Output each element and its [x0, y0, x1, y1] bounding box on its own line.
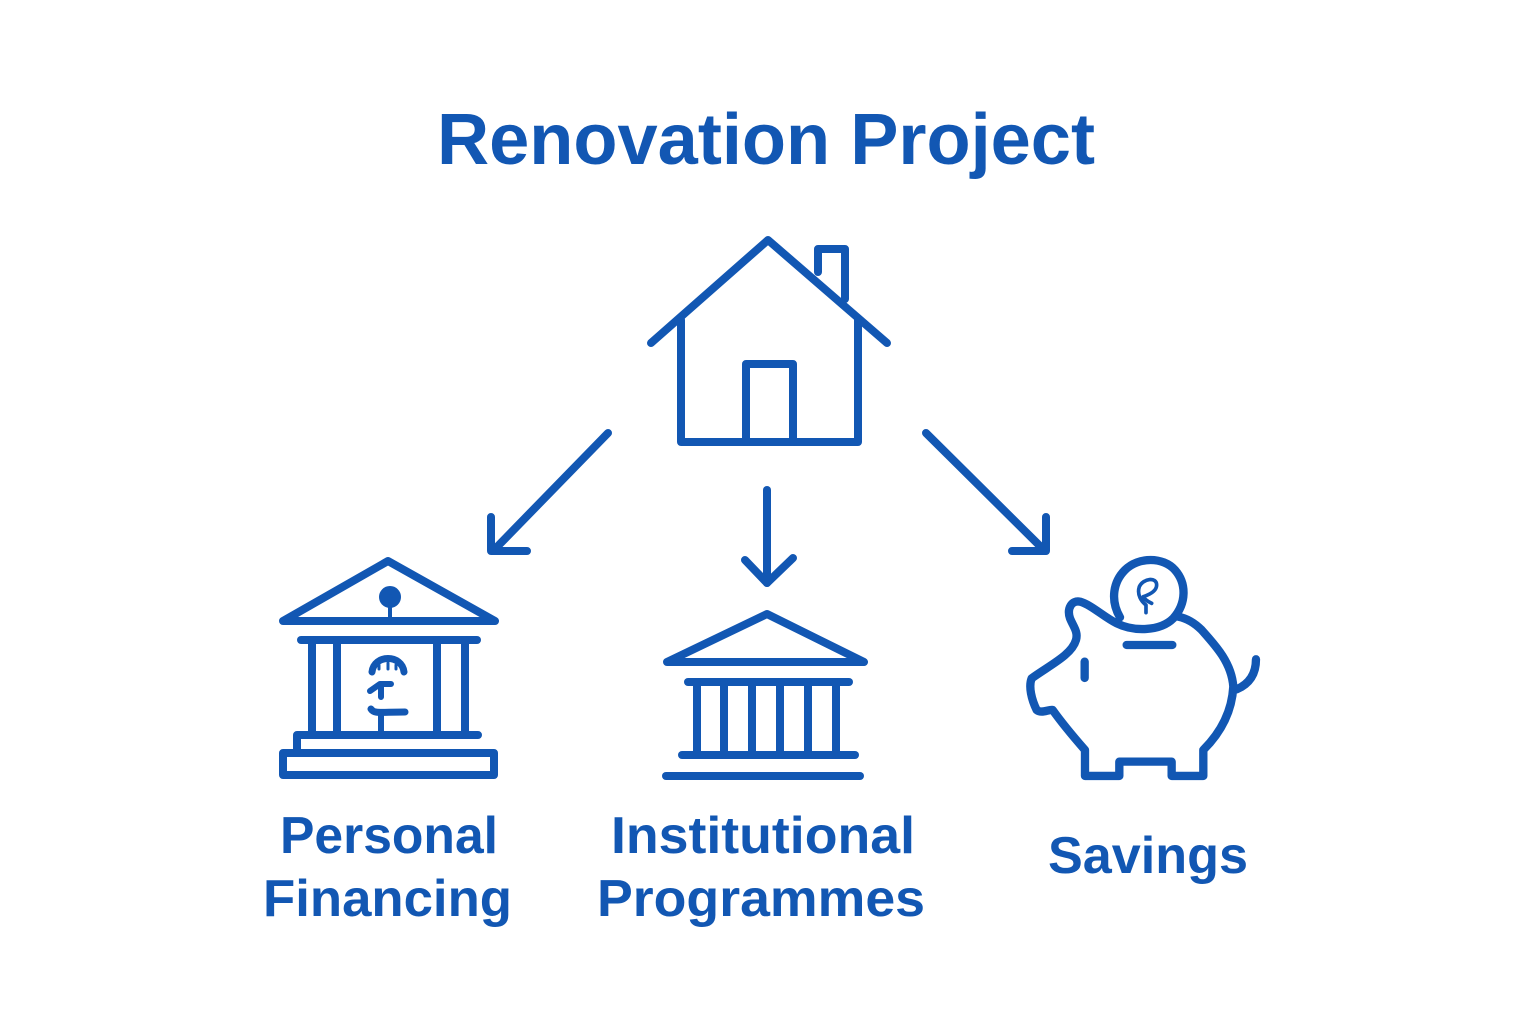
icon: coin glyph [1139, 580, 1157, 613]
icon: institutional bank [666, 614, 864, 776]
arrow: to institutional programmes [745, 490, 793, 583]
arrow: to savings [926, 433, 1046, 551]
icon: house [651, 240, 887, 442]
label: institutional programmes: Programmes [597, 870, 925, 928]
label: personal financing [263, 807, 512, 928]
icon: personal financing bank [283, 561, 495, 775]
label: personal financing: Personal [280, 807, 498, 865]
label: personal financing: Financing [263, 870, 512, 928]
label: institutional programmes [597, 807, 925, 928]
icon: piggy bank [1030, 560, 1256, 776]
arrow: to personal financing [491, 433, 608, 551]
label: institutional programmes: Institutional [611, 807, 915, 865]
label: savings: Savings [1048, 827, 1248, 885]
icon: bank inner glyph [370, 658, 405, 733]
title: Renovation Project [437, 100, 1095, 180]
